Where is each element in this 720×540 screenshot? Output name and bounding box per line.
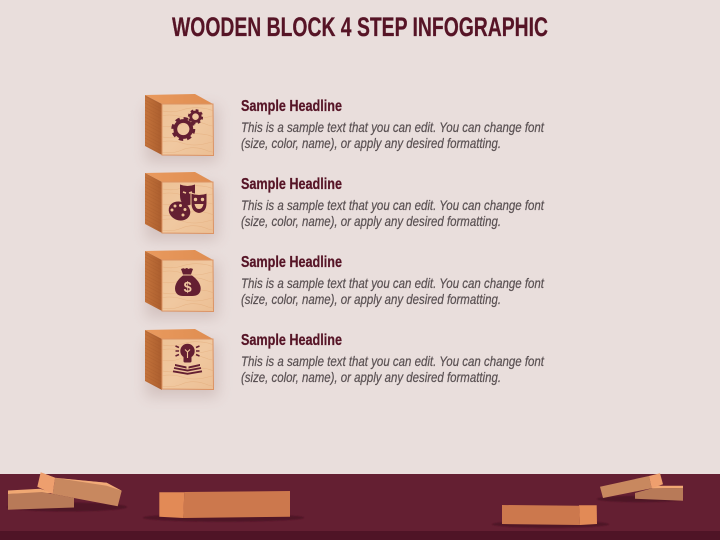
- body text 3: (size, color, name), or apply any desired formatting.: [241, 291, 501, 307]
- block 3 with money bag icon: [145, 250, 218, 318]
- body text 4: [241, 353, 545, 385]
- step 3: block and text: [145, 250, 545, 318]
- right stacked bricks: [597, 473, 683, 502]
- icon: money bag: $: [184, 280, 192, 296]
- block 4 with lightbulb and book icon: [145, 329, 218, 397]
- left stacked bricks: [7, 472, 127, 512]
- step 1: block and text: [145, 94, 545, 162]
- body text 1: This is a sample text that you can edit. You can change font: [241, 119, 545, 135]
- body text 1: (size, color, name), or apply any desired formatting.: [241, 135, 501, 151]
- body text 3: This is a sample text that you can edit. You can change font: [241, 275, 545, 291]
- body text 2: [241, 197, 545, 229]
- icon: gears: [172, 110, 202, 140]
- headline 2: Sample Headline: [241, 176, 342, 193]
- title: WOODEN BLOCK 4 STEP INFOGRAPHIC: [172, 12, 548, 42]
- body text 2: (size, color, name), or apply any desired formatting.: [241, 213, 501, 229]
- block 2 with masks and palette icon: [145, 172, 218, 240]
- headline 4: Sample Headline: [241, 332, 342, 349]
- body text 4: This is a sample text that you can edit. You can change font: [241, 353, 545, 369]
- floor band: [0, 474, 720, 540]
- body text 3: [241, 275, 545, 307]
- icon: theatre masks and palette: [166, 184, 207, 224]
- centre-left brick: [143, 491, 304, 522]
- headline 1: Sample Headline: [241, 98, 342, 115]
- step 4: block and text: [145, 329, 545, 397]
- body text 4: (size, color, name), or apply any desired formatting.: [241, 369, 501, 385]
- body text 1: [241, 119, 545, 151]
- icon: lightbulb over open book: [173, 344, 202, 374]
- block 1 with gears icon: [145, 94, 218, 162]
- step 2: block and text: [145, 172, 545, 240]
- body text 2: This is a sample text that you can edit. You can change font: [241, 197, 545, 213]
- centre-right brick: [492, 505, 609, 528]
- headline 3: Sample Headline: [241, 254, 342, 271]
